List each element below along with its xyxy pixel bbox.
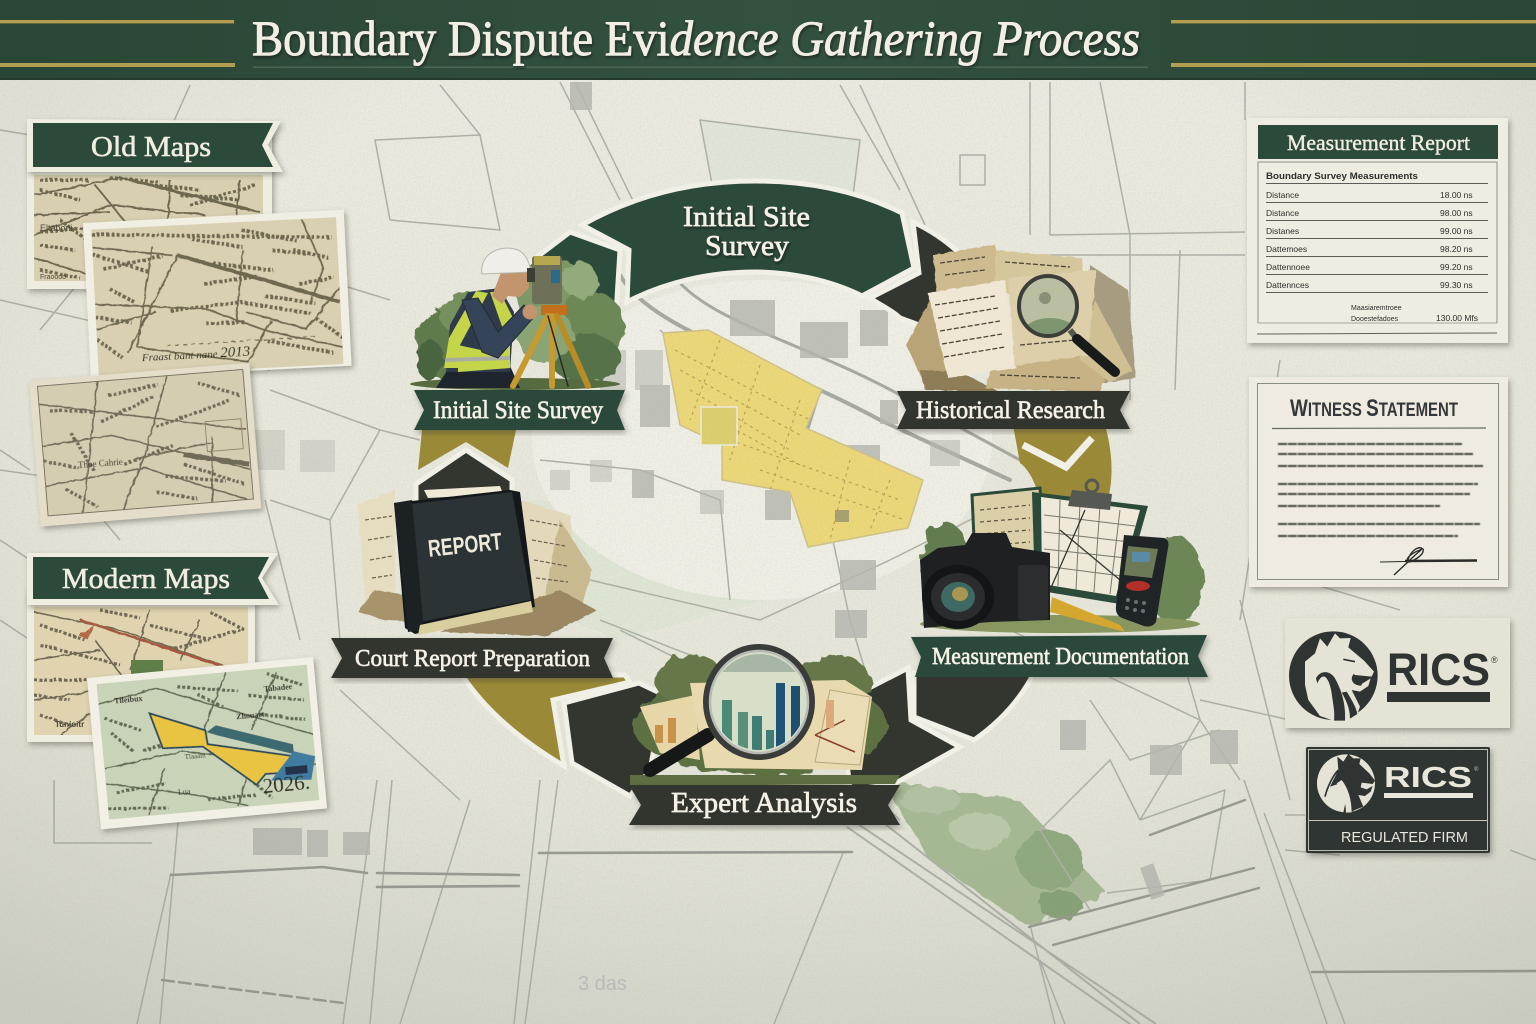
step label: Historical Research xyxy=(897,391,1130,429)
measurement table: 18.00 ns xyxy=(1440,190,1473,200)
tripod xyxy=(513,316,588,386)
faint map scale text: 3 das xyxy=(578,973,627,995)
banner: Old Maps: Old Maps xyxy=(91,131,211,163)
camera xyxy=(920,533,1050,628)
measurement table: Distanes xyxy=(1266,226,1299,236)
modern map card 2: Tileibux xyxy=(114,694,143,706)
step heading on ring xyxy=(683,202,810,262)
banner: Modern Maps xyxy=(27,553,279,605)
segment: left olive xyxy=(418,430,516,470)
measurement table: 98.00 ns xyxy=(1440,208,1473,218)
chevron: left dark xyxy=(416,450,512,540)
green plot xyxy=(882,780,1107,927)
measurement table: Maasiaremtroee xyxy=(1351,305,1402,312)
handle xyxy=(650,735,708,770)
panel: modern maps xyxy=(27,553,327,829)
old map card 3: Thoe Cahrie xyxy=(78,457,123,470)
step label: Court Report Preparation xyxy=(331,638,613,678)
panel: witness statement xyxy=(1249,377,1508,587)
total station xyxy=(532,256,562,304)
old map card 1: Eltaboni xyxy=(40,223,73,233)
step heading on ring: Survey xyxy=(705,231,789,262)
measurement table: 99.00 ns xyxy=(1440,226,1473,236)
tree xyxy=(416,259,624,382)
legs xyxy=(436,366,520,388)
segment: upper left green xyxy=(520,232,620,320)
report heading: Measurement Report xyxy=(1287,130,1470,155)
panel: measurement report xyxy=(1247,118,1508,343)
signature xyxy=(1380,548,1477,575)
segment: right olive xyxy=(1013,425,1112,510)
glass xyxy=(705,646,813,758)
logo: RICS xyxy=(1285,618,1510,728)
step label: Historical Research: Historical Research xyxy=(916,397,1105,424)
old map card 1: Fraoooo xyxy=(40,274,66,281)
modern map card 2 xyxy=(87,657,327,829)
magnifier xyxy=(1020,277,1076,335)
icon: expert analysis magnifier and charts xyxy=(630,646,900,786)
logo: RICS: ® xyxy=(1491,655,1498,665)
modern map card 2: Tlaaain xyxy=(184,751,207,761)
lion emblem xyxy=(1289,631,1378,721)
book title: REPORT xyxy=(427,528,504,563)
measurement table: 99.20 ns xyxy=(1440,262,1473,272)
measurement table: Dattennces xyxy=(1266,280,1309,290)
logo: RICS regulated firm: ® xyxy=(1474,766,1479,773)
segment: far right dark xyxy=(914,673,1034,740)
modern map card 2: Lua xyxy=(178,787,191,797)
step label: Measurement Documentation xyxy=(911,635,1208,677)
segment: upper right dark xyxy=(870,222,960,340)
map building blocks xyxy=(245,82,1238,900)
sleeve xyxy=(462,298,534,358)
step heading on ring: Initial Site xyxy=(683,202,810,233)
panel: old maps xyxy=(27,119,352,527)
measurement table: Boundary Survey Measurements xyxy=(1266,171,1418,182)
banner: Modern Maps: Modern Maps xyxy=(62,563,230,595)
face xyxy=(492,270,529,304)
icon: court report book xyxy=(358,486,596,636)
old map card 2: Fraast bant nane 2013 xyxy=(140,344,251,365)
step label: Initial Site Survey xyxy=(414,390,625,430)
icon: measurement kit xyxy=(920,480,1203,633)
hi-vis vest xyxy=(444,291,488,368)
central disputed parcel xyxy=(663,330,923,547)
road across centre xyxy=(162,270,1536,1003)
ruler xyxy=(1050,597,1125,632)
modern map card 2: Tabadee xyxy=(263,682,293,694)
banner: Old Maps xyxy=(27,119,283,172)
arrow: top green xyxy=(582,181,914,302)
step label: Court Report Preparation: Court Report Preparation xyxy=(355,646,590,672)
measurement table: 98.20 ns xyxy=(1440,244,1473,254)
step label: Measurement Documentation: Measurement Documentation xyxy=(932,644,1189,670)
torso xyxy=(446,288,514,372)
title banner xyxy=(0,0,1536,80)
rangefinder device xyxy=(1116,535,1168,626)
modern map card 2: 2026. xyxy=(262,770,311,798)
segment: lower dark xyxy=(564,683,664,796)
measurement table: 99.30 ns xyxy=(1440,280,1473,290)
measurement table: Distance xyxy=(1266,208,1299,218)
segment: lower right dark xyxy=(840,668,960,790)
modern map card 1: Tunioitr xyxy=(55,720,84,729)
measurement table: Dattennoee xyxy=(1266,262,1310,272)
measurement table: Distance xyxy=(1266,190,1299,200)
process ring xyxy=(416,181,1112,796)
icon: historical documents with magnifier xyxy=(906,245,1136,392)
old map card 3 xyxy=(29,363,261,527)
step label: Initial Site Survey: Initial Site Survey xyxy=(433,397,603,424)
modern map card 2: Zhouaet xyxy=(236,710,265,721)
statement text lines xyxy=(1278,444,1483,536)
logo: RICS regulated firm: RICS xyxy=(1384,762,1472,794)
title text: Boundary Dispute Evidence Gathering Process xyxy=(252,10,1140,66)
old map card 2 xyxy=(83,210,352,379)
helmet xyxy=(482,248,531,274)
step label: Expert Analysis xyxy=(629,785,900,825)
logo: RICS regulated firm: REGULATED FIRM xyxy=(1341,830,1468,846)
measurement table: Dattemoes xyxy=(1266,244,1307,254)
step label: Expert Analysis: Expert Analysis xyxy=(671,788,857,819)
chevron gap: right xyxy=(1023,438,1092,467)
measurement table: 130.00 Mfs xyxy=(1436,313,1478,323)
report heading xyxy=(1258,125,1498,159)
logo: RICS regulated firm xyxy=(1306,747,1490,853)
icon: surveyor with total station xyxy=(410,248,624,390)
logo: RICS: RICS xyxy=(1387,644,1490,695)
modern map card 1 xyxy=(27,590,255,742)
lion emblem xyxy=(1317,754,1375,813)
old map card 1 xyxy=(27,130,272,289)
witness heading: WITNESS STATEMENT xyxy=(1290,395,1458,422)
measurement table: Dooestefadoes xyxy=(1351,316,1399,323)
clipboard xyxy=(1032,492,1148,604)
measurement table xyxy=(1266,171,1488,323)
segment: lower left olive xyxy=(462,675,630,766)
